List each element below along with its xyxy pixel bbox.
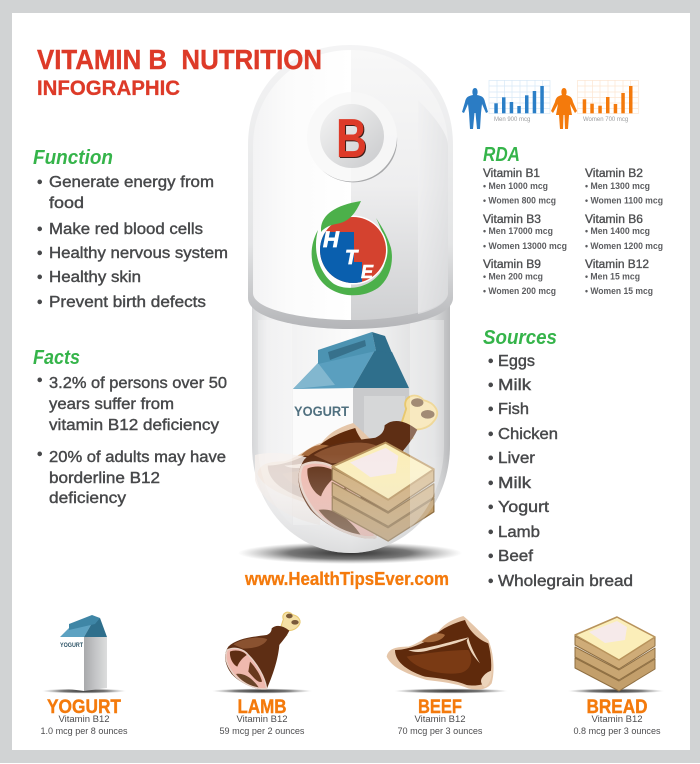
lamb inside capsule [298, 396, 437, 539]
sources list: • [488, 401, 493, 418]
sources list: Eggs [498, 353, 535, 370]
bread inside capsule [332, 443, 434, 541]
website URL: www.HealthTipsEver.com [244, 569, 449, 589]
title: INFOGRAPHIC [37, 77, 180, 100]
RDA right column: • Women 15 mcg [585, 286, 653, 297]
label: YOGURT [47, 697, 121, 718]
women chart [551, 80, 638, 129]
title: VITAMIN B NUTRITION [37, 44, 322, 75]
facts list [37, 372, 227, 507]
food card: yogurt: 1.0 mcg per 8 ounces [40, 726, 128, 737]
men chart [462, 80, 550, 129]
food card: lamb: 59 mcg per 2 ounces [220, 726, 305, 737]
sources list: Liver [498, 450, 535, 467]
food card: bread [568, 617, 664, 737]
icon: man [462, 88, 488, 129]
glass highlights [252, 305, 450, 553]
facts heading: Facts [33, 347, 80, 369]
B badge: B [336, 107, 367, 169]
RDA right column: • Men 15 mcg [585, 272, 640, 282]
panel: sources [483, 327, 633, 590]
detail: Vitamin B12 [414, 714, 466, 725]
sources list: Wholegrain bread [498, 573, 633, 590]
shadow [212, 688, 312, 694]
shadow [42, 688, 126, 694]
facts list: • [37, 372, 42, 389]
food card: beef [387, 616, 508, 737]
panel: function [33, 147, 228, 311]
beef inside capsule [255, 423, 391, 525]
RDA left column: • Women 200 mcg [483, 286, 556, 297]
carton inside capsule [293, 332, 409, 525]
sources list: • [488, 475, 493, 492]
sources list: Chicken [498, 426, 558, 443]
RDA left column: • Men 200 mcg [483, 272, 543, 282]
facts list: borderline B12 [49, 470, 160, 487]
RDA left column: Vitamin B1 [483, 168, 540, 180]
HTE logo: H [323, 227, 340, 252]
carton inside capsule: YOGURT [294, 403, 349, 419]
RDA left column: • Men 1000 mcg [483, 181, 548, 192]
function list: Make red blood cells [49, 221, 203, 238]
capsule lower glass shell [252, 305, 450, 553]
men bars [494, 86, 544, 113]
sources list: Lamb [498, 524, 540, 541]
RDA left column: Vitamin B9 [483, 259, 541, 271]
function list: • [37, 174, 42, 191]
label: BREAD [586, 697, 648, 718]
sources list: • [488, 450, 493, 467]
sources list: • [488, 353, 493, 370]
food card: lamb [212, 612, 312, 737]
sources list: Milk [498, 475, 531, 492]
icon: lamb [225, 612, 300, 689]
HTE logo: T [345, 247, 359, 269]
sources list: Fish [498, 401, 529, 418]
sources list [488, 353, 633, 590]
function list: • [37, 294, 42, 311]
sources heading: Sources [483, 327, 557, 349]
panel: facts [33, 347, 227, 507]
function list: Healthy skin [49, 269, 141, 286]
RDA right column: Vitamin B6 [585, 214, 643, 226]
facts list: 20% of adults may have [49, 449, 226, 466]
function list: • [37, 269, 42, 286]
icon: woman [551, 88, 577, 129]
women grid [577, 80, 638, 114]
panel: RDA [483, 144, 663, 297]
HTE logo [312, 201, 392, 295]
facts list: deficiency [49, 490, 126, 507]
function list: Generate energy from [49, 174, 214, 191]
B badge [307, 92, 397, 182]
sources list: • [488, 377, 493, 394]
RDA left column [483, 168, 567, 297]
function heading: Function [33, 147, 113, 169]
facts list: 3.2% of persons over 50 [49, 375, 227, 392]
food card: yogurt [40, 615, 128, 737]
detail: Vitamin B12 [58, 714, 110, 725]
sources list: • [488, 524, 493, 541]
sources list: Milk [498, 377, 531, 394]
RDA right column [585, 168, 663, 297]
sources list: • [488, 499, 493, 516]
function list: food [49, 195, 84, 212]
RDA left column: • Women 13000 mcg [483, 241, 567, 252]
sources list: • [488, 573, 493, 590]
RDA left column: Vitamin B3 [483, 214, 541, 226]
function list: Healthy nervous system [49, 245, 228, 262]
detail: Vitamin B12 [236, 714, 288, 725]
HTE logo: E [361, 262, 374, 282]
RDA right column: • Men 1400 mcg [585, 226, 650, 237]
food card: beef: 70 mcg per 3 ounces [398, 726, 483, 737]
B badge: B [337, 108, 368, 170]
function list: • [37, 221, 42, 238]
facts list: years suffer from [49, 396, 174, 413]
icon: beef [387, 616, 494, 690]
men label: Men 900 mcg [494, 117, 530, 123]
shadow [568, 688, 664, 694]
detail: Vitamin B12 [591, 714, 643, 725]
RDA right column: • Women 1200 mcg [585, 241, 663, 252]
RDA right column: • Men 1300 mcg [585, 181, 650, 192]
function list [37, 174, 228, 311]
RDA right column: • Women 1100 mcg [585, 196, 663, 206]
capsule floor shadow [238, 542, 462, 564]
sources list: Yogurt [498, 499, 550, 516]
icon: yogurt carton: YOGURT [60, 642, 83, 649]
men grid [489, 80, 550, 114]
facts list: • [37, 446, 42, 463]
title [37, 44, 322, 100]
shadow [394, 688, 508, 694]
function list: Prevent birth defects [49, 294, 206, 311]
label: LAMB [238, 697, 286, 718]
RDA left column: • Women 800 mcg [483, 196, 556, 206]
RDA right column: Vitamin B2 [585, 168, 643, 180]
facts list: vitamin B12 deficiency [49, 417, 219, 434]
sources list: • [488, 426, 493, 443]
food card: bread: 0.8 mcg per 3 ounces [574, 726, 661, 737]
function list: • [37, 245, 42, 262]
women label: Women 700 mcg [583, 117, 628, 123]
capsule illustration [238, 45, 462, 564]
RDA left column: • Men 17000 mcg [483, 226, 553, 237]
RDA right column: Vitamin B12 [585, 259, 649, 271]
capsule upper shell [248, 45, 453, 329]
sources list: • [488, 548, 493, 565]
icon: bread [575, 617, 655, 691]
sources list: Beef [498, 548, 534, 565]
RDA heading: RDA [483, 144, 520, 166]
label: BEEF [418, 697, 462, 718]
women bars [583, 86, 632, 113]
